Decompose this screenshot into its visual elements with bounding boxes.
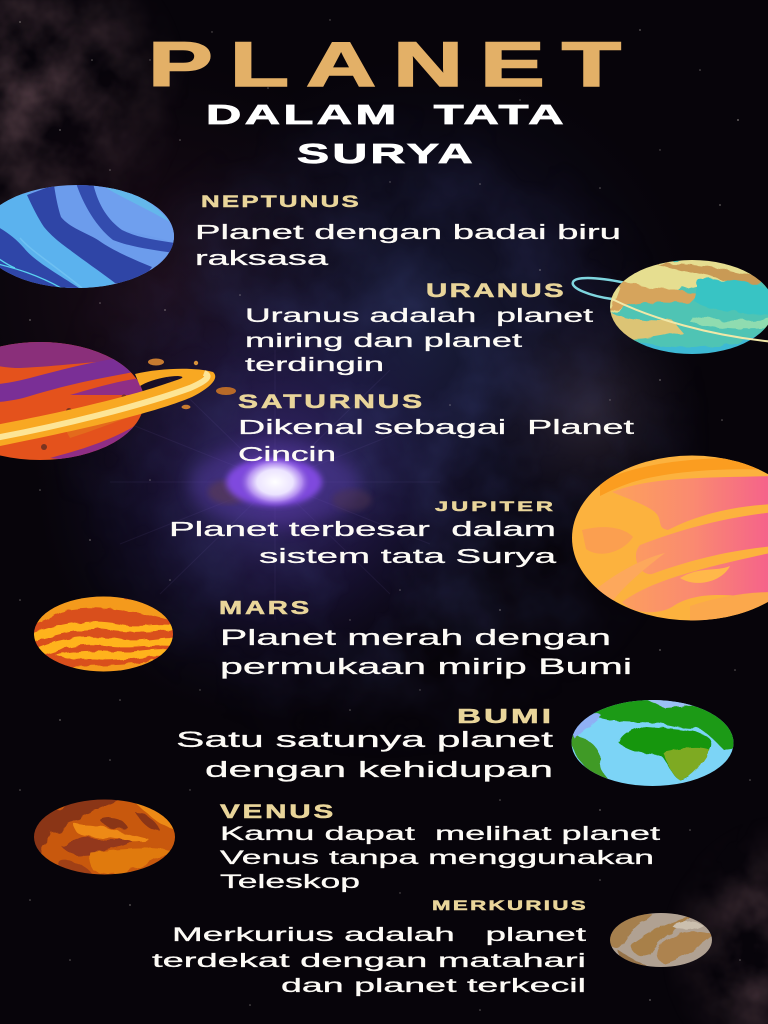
description: uranus <box>245 306 594 376</box>
description: uranus: Uranus adalah planet <box>245 306 594 327</box>
description: uranus: miring dan planet <box>245 331 523 352</box>
description: merkurius: dan planet terkecil <box>281 975 586 997</box>
description: venus: Venus tanpa menggunakan <box>220 847 654 869</box>
heading: venus: VENUS <box>220 802 336 823</box>
title: PLANET: PLANET <box>148 30 638 100</box>
heading: mars: MARS <box>219 598 312 618</box>
panel: bumi <box>176 696 738 788</box>
subtitle: DALAM TATA SURYA: DALAM TATA <box>206 99 567 130</box>
description: venus <box>220 823 661 893</box>
description: mars <box>220 625 632 679</box>
description: neptunus: Planet dengan badai biru <box>195 222 621 244</box>
panel: uranus <box>245 250 768 376</box>
panel: neptunus <box>0 185 619 288</box>
icon: planet mars <box>34 596 173 672</box>
icon: planet bumi <box>572 700 734 786</box>
heading: neptunus: NEPTUNUS <box>201 192 361 211</box>
description: uranus: terdingin <box>245 355 384 376</box>
description: merkurius: terdekat dengan matahari <box>152 950 586 972</box>
panel: jupiter <box>169 454 768 625</box>
panel: venus <box>34 800 660 892</box>
panel: mars <box>28 590 632 679</box>
heading: uranus: URANUS <box>426 281 566 302</box>
icon: planet merkurius <box>610 913 712 967</box>
description: jupiter: sistem tata Surya <box>259 546 558 568</box>
description: venus: Teleskop <box>220 871 360 893</box>
heading: jupiter: JUPITER <box>435 498 556 514</box>
description: saturnus: Cincin <box>238 444 336 466</box>
description: bumi <box>176 727 553 782</box>
description: merkurius: Merkurius adalah planet <box>172 924 587 946</box>
icon: planet jupiter <box>570 454 768 625</box>
description: merkurius <box>152 924 587 997</box>
icon: planet venus <box>34 800 175 874</box>
heading: bumi: BUMI <box>457 706 554 728</box>
description: saturnus <box>238 417 635 466</box>
description: bumi: dengan kehidupan <box>205 757 553 782</box>
description: jupiter: Planet terbesar dalam <box>169 519 556 541</box>
icon: planet uranus with ring <box>571 260 768 354</box>
description: neptunus: raksasa <box>195 248 330 270</box>
heading: saturnus: SATURNUS <box>238 392 425 413</box>
icon: planet neptunus <box>0 185 174 288</box>
description: neptunus <box>195 222 621 270</box>
description: saturnus: Dikenal sebagai Planet <box>238 417 635 439</box>
starburst: glowing purple star <box>110 350 440 620</box>
heading: merkurius: MERKURIUS <box>432 897 588 913</box>
description: mars: permukaan mirip Bumi <box>220 654 632 679</box>
panel: merkurius <box>152 897 720 997</box>
description: jupiter <box>169 519 558 568</box>
panel: saturnus <box>0 338 635 470</box>
description: mars: Planet merah dengan <box>220 625 611 650</box>
description: bumi: Satu satunya planet <box>176 727 553 752</box>
icon: planet saturnus with ring and rocks <box>0 342 236 460</box>
subtitle: DALAM TATA SURYA <box>206 99 567 169</box>
subtitle: DALAM TATA SURYA: SURYA <box>297 138 476 169</box>
description: venus: Kamu dapat melihat planet <box>220 823 661 845</box>
